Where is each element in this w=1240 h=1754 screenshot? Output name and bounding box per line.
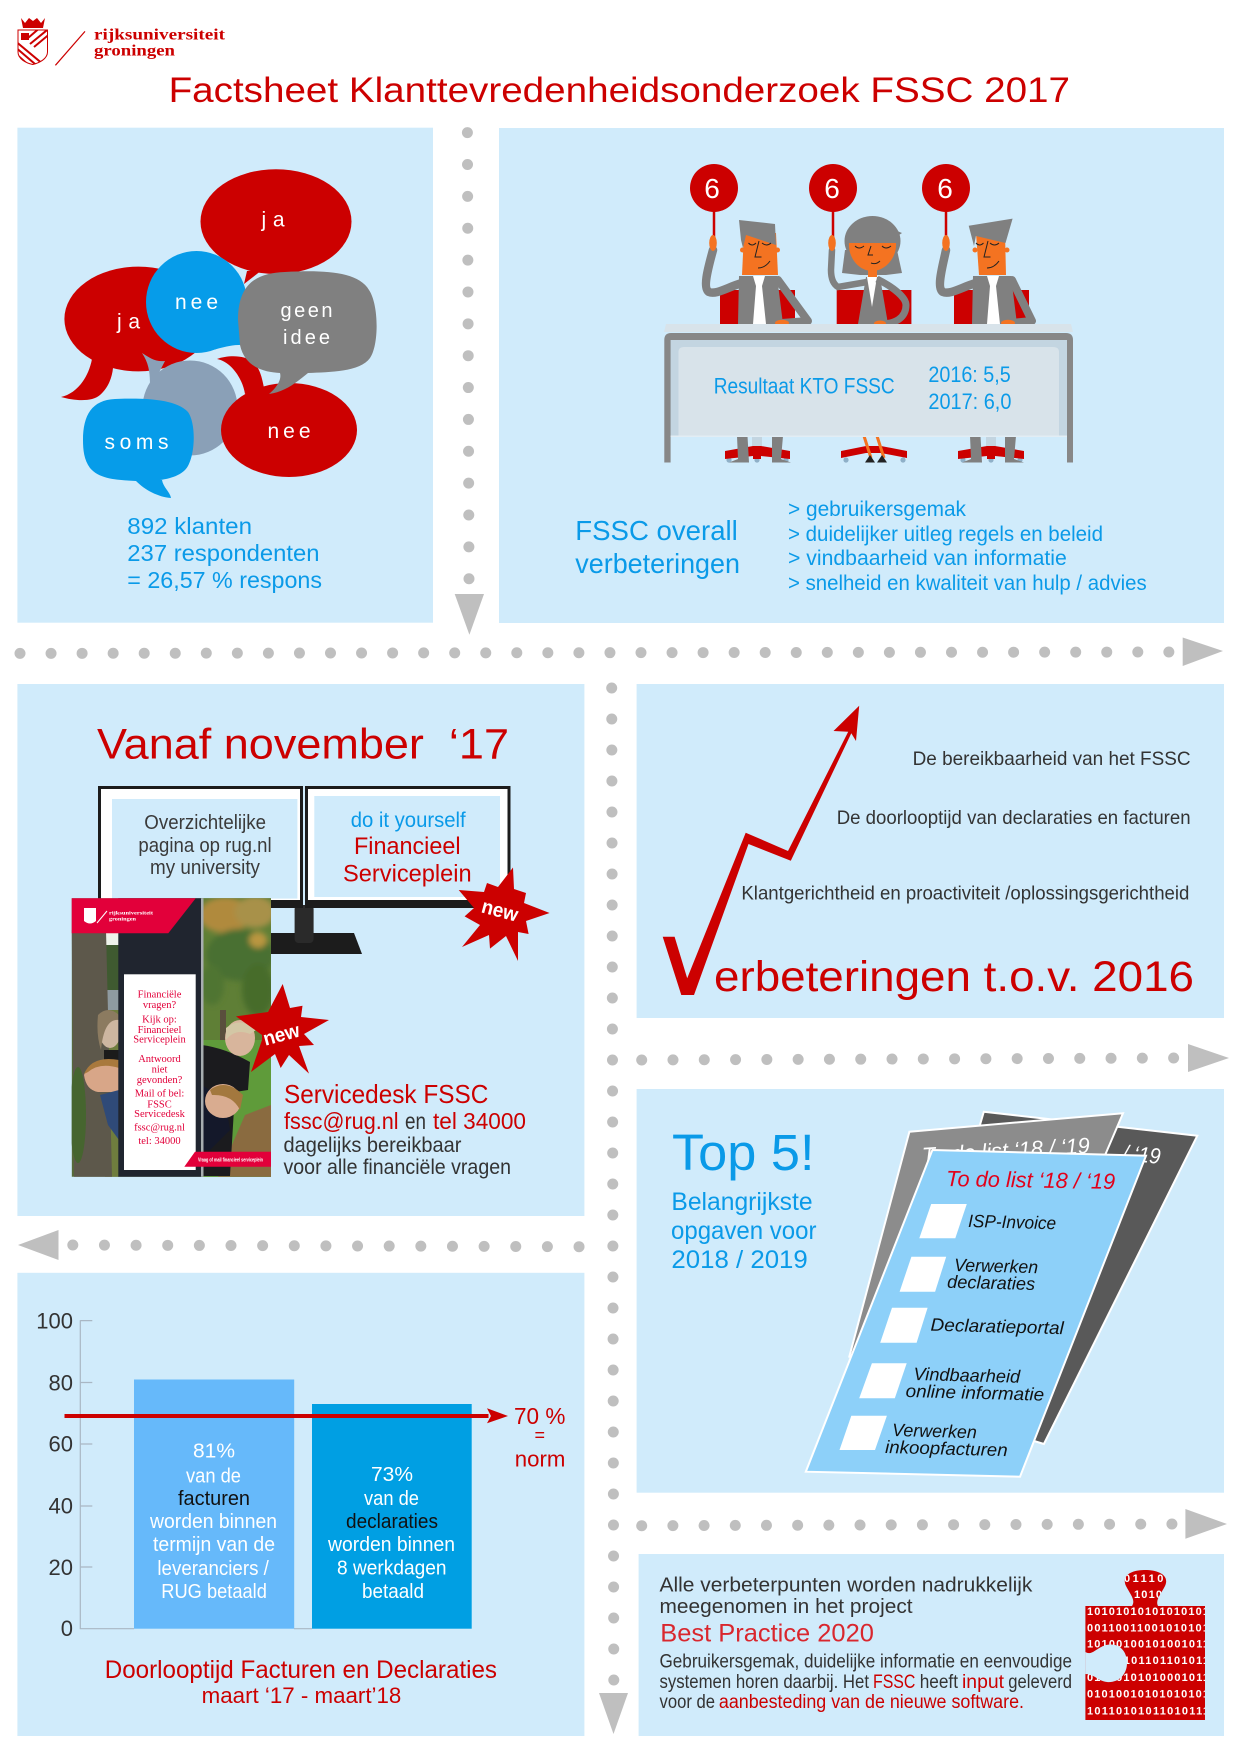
speech bubble: nee (red): [217, 356, 357, 477]
poster card: Antwoord: [138, 1054, 182, 1065]
panel: doorlooptijd chart: [17, 1273, 584, 1736]
body text: FSSC: [873, 1672, 915, 1693]
item: Verwerken declaraties: [900, 1255, 1038, 1294]
score signs: 6: [937, 173, 953, 204]
icon: binary puzzle piece: 10101010101010101: [1087, 1606, 1209, 1618]
middle sheet: To do list ‘18 / ‘19: [921, 1133, 1090, 1168]
heading: Top 5: Top 5!: [672, 1124, 814, 1181]
poster card: tel: 34000: [138, 1136, 181, 1147]
axis labels: 100: [36, 1309, 73, 1334]
bar: facturen 81%: 81%: [193, 1439, 235, 1462]
bar: facturen 81%: RUG betaald: [161, 1580, 267, 1603]
back sheet: [900, 1112, 1197, 1444]
servicedesk contact text: voor alle financiële vragen: [284, 1156, 511, 1179]
item: Vindbaarheid online informatie: [859, 1363, 1044, 1405]
monitor: overzichtelijke pagina: pagina op rug.nl: [138, 835, 272, 857]
dotted arrow: right (row 3): [642, 1509, 1227, 1539]
speech bubble: nee (blue): [146, 251, 247, 353]
poster banner logo: [84, 908, 153, 924]
body text: aanbesteding van de nieuwe software.: [719, 1692, 1024, 1713]
heading: verbeteringen: erbeteringen t.o.v. 2016: [714, 953, 1194, 1001]
bar: declaraties 73%: 8 werkdagen: [337, 1556, 446, 1580]
servicedesk contact text: fssc@rug.nl: [284, 1108, 399, 1134]
poster card: Financiële: [138, 990, 182, 1001]
axis labels: 0: [61, 1616, 73, 1641]
heading: Vanaf november '17: Vanaf november ‘17: [97, 721, 509, 769]
list: verbeteringen: > snelheid en kwaliteit van hulp / advies: [788, 571, 1147, 595]
poster banner: [72, 898, 196, 933]
speech bubble: nee (red): nee: [268, 420, 310, 443]
icon: binary puzzle piece: 1010: [1134, 1589, 1162, 1601]
table text: results: 2016: 5,5: [928, 362, 1011, 387]
poster banner logo: rijksuniversiteit: [109, 910, 153, 916]
logo wordmark: groningen: [94, 42, 175, 60]
icon: binary puzzle piece: 01010010101010101: [1087, 1689, 1209, 1701]
bar: declaraties 73%: worden binnen: [327, 1533, 455, 1556]
bar: declaraties 73%: van de: [364, 1487, 419, 1510]
table text: results: 2017: 6,0: [928, 389, 1011, 414]
bar: declaraties 73%: declaraties: [346, 1510, 438, 1533]
item: Declaratieportal: Declaratieportal: [930, 1315, 1065, 1338]
score signs: 6: [704, 173, 720, 204]
front sheet: To do list ‘18 / ‘19: [946, 1166, 1115, 1194]
axis: [80, 1320, 312, 1629]
improvement items: De bereikbaarheid van het FSSC: [913, 748, 1191, 770]
speech bubble: geen idee: [238, 271, 377, 394]
icon: binary puzzle piece: 01010101010001011: [1087, 1672, 1209, 1684]
intro text: meegenomen in het project: [660, 1595, 913, 1618]
middle sheet: [849, 1113, 1123, 1400]
item: Verwerken inkoopfacturen: inkoopfacturen: [885, 1437, 1008, 1460]
slash: [55, 31, 85, 65]
axis labels: 40: [49, 1494, 73, 1519]
dotted arrow: down (top): [455, 133, 484, 635]
panel: resultaat KTO: [499, 128, 1224, 623]
score signs: 6: [824, 173, 840, 204]
poster card: Financieel: [138, 1025, 181, 1036]
bar: declaraties 73%: betaald: [362, 1580, 424, 1603]
item: Verwerken inkoopfacturen: Verwerken: [892, 1420, 977, 1442]
logo: rijksuniversiteit groningen: [14, 18, 226, 70]
list: verbeteringen: > vindbaarheid van informatie: [788, 546, 1067, 570]
poster card: gevonden?: [137, 1075, 183, 1086]
monitor: overzichtelijke pagina: my university: [150, 857, 260, 879]
subheading: 2018 / 2019: [671, 1246, 808, 1274]
title: Factsheet Klanttevredenheidsonderzoek FSSC 2017: [169, 71, 1070, 110]
dark column: [118, 898, 202, 1177]
judge 3: [940, 205, 1032, 326]
icon: binary puzzle piece: 00110011001010101: [1087, 1623, 1209, 1635]
bar: facturen 81%: facturen: [178, 1487, 250, 1510]
speech bubble: soms: soms: [104, 431, 168, 454]
front sheet: [806, 1150, 1146, 1477]
axis labels: 60: [49, 1432, 73, 1457]
intro text: Alle verbeterpunten worden nadrukkelijk: [660, 1574, 1033, 1597]
monitor: financieel serviceplein: Serviceplein: [343, 860, 472, 887]
monitor: financieel serviceplein: [305, 788, 510, 908]
chart caption: Doorlooptijd Facturen en Declaraties: [105, 1656, 497, 1684]
poster card: Kijk op:: [142, 1015, 177, 1026]
item: Vindbaarheid online informatie: online informatie: [905, 1381, 1044, 1405]
poster card: niet: [152, 1065, 167, 1076]
response statistics: [127, 513, 322, 593]
monitor: financieel serviceplein: do it yourself: [351, 809, 466, 832]
item: Declaratieportal: [880, 1308, 1065, 1343]
intro text: [660, 1574, 1033, 1618]
heading: FSSC overall verbeteringen: [575, 515, 740, 579]
axis labels: [36, 1309, 73, 1641]
improvement items: De doorlooptijd van declaraties en facturen: [837, 807, 1191, 829]
panel: top 5: [637, 1089, 1224, 1493]
speech bubble: nee (blue): nee: [175, 291, 218, 314]
speech bubble: ja (left): [61, 267, 212, 400]
back sheet: / ‘19: [1120, 1140, 1162, 1169]
heading: Best Practice 2020: Best Practice 2020: [660, 1620, 874, 1648]
heading: FSSC overall verbeteringen: FSSC overall: [575, 515, 738, 546]
judge 1: [706, 205, 808, 326]
icon: university crest: [18, 18, 48, 65]
illustration: judges at table: [664, 164, 1073, 463]
dotted arrow: left: [18, 1230, 579, 1260]
to do list sheets: [806, 1112, 1197, 1477]
poster card: Mail of bel:: [135, 1089, 184, 1100]
servicedesk contact text: dagelijks bereikbaar: [284, 1134, 461, 1157]
body text: Gebruikersgemak, duidelijke informatie en eenvoudige: [660, 1652, 1072, 1673]
bar: facturen 81%: van de: [186, 1464, 241, 1488]
poster card: fssc@rug.nl: [134, 1123, 185, 1134]
bar: facturen 81%: termijn van de: [153, 1533, 275, 1556]
servicedesk contact text: Servicedesk FSSC: [284, 1079, 488, 1109]
panel: vanaf november 17: [17, 684, 584, 1216]
icon: binary puzzle piece: 10110101011010111: [1087, 1705, 1209, 1717]
bar: facturen 81%: [134, 1380, 294, 1629]
badge: new (monitor): new: [479, 896, 521, 927]
norm label: [514, 1403, 565, 1472]
monitor: overzichtelijke pagina: Overzichtelijke: [144, 812, 266, 834]
item: ISP-Invoice: ISP-Invoice: [968, 1211, 1056, 1233]
servicedesk contact text: [284, 1079, 526, 1179]
icon: binary puzzle piece: 10100101101101011: [1087, 1655, 1209, 1667]
logo wordmark: [94, 27, 226, 60]
norm label: 70 %: [514, 1403, 565, 1429]
speech bubble: geen idee: geen: [280, 300, 332, 322]
panel: respons: [17, 128, 433, 623]
axis labels: 80: [49, 1370, 73, 1396]
subheading: [671, 1188, 816, 1274]
improvement items: [741, 748, 1191, 904]
heading: FSSC overall verbeteringen: verbeteringen: [575, 548, 740, 579]
body text: geleverd: [1008, 1672, 1072, 1693]
left photo: [106, 933, 118, 945]
bar: declaraties 73%: 73%: [371, 1463, 413, 1486]
dotted arrow: right (row 2): [642, 1044, 1229, 1072]
table text: results: [714, 362, 1011, 414]
bar: facturen 81%: worden binnen: [149, 1510, 277, 1533]
panel: best practice 2020: [639, 1554, 1224, 1736]
poster card: Serviceplein: [133, 1035, 186, 1046]
score signs: [690, 164, 970, 212]
item: ISP-Invoice: [919, 1204, 1056, 1238]
subheading: opgaven voor: [671, 1217, 816, 1245]
poster card: [124, 974, 196, 1170]
body text: voor de: [660, 1692, 715, 1713]
chart caption: maart ‘17 - maart’18: [202, 1683, 401, 1708]
item: Verwerken declaraties: Verwerken: [954, 1255, 1038, 1277]
axis labels: 20: [49, 1555, 73, 1580]
norm arrow 70%: [64, 1408, 508, 1423]
dotted arrow: down (centre): [599, 688, 628, 1734]
list: verbeteringen: > gebruikersgemak: [788, 497, 966, 521]
item: Verwerken declaraties: declaraties: [947, 1272, 1035, 1294]
judge 2: [828, 205, 911, 326]
servicedesk contact text: tel 34000: [433, 1108, 526, 1134]
monitor: overzichtelijke pagina: [98, 788, 302, 908]
legs and chair bases: [725, 436, 1024, 463]
norm label: =: [534, 1425, 545, 1445]
badge: new (poster): [236, 984, 329, 1074]
body text: input: [962, 1672, 1005, 1693]
monitor stand: [271, 905, 362, 954]
bar: facturen 81%: leveranciers /: [157, 1557, 269, 1580]
poster card: FSSC: [147, 1100, 172, 1111]
icon: binary puzzle piece: [1085, 1570, 1209, 1720]
servicedesk contact text: en: [405, 1108, 426, 1134]
subheading: Belangrijkste: [671, 1188, 813, 1216]
list: verbeteringen: > duidelijker uitleg regels en beleid: [788, 522, 1103, 546]
speech bubble: ja (top): ja: [260, 208, 285, 232]
body text: [660, 1652, 1072, 1713]
response statistics: = 26,57 % respons: [127, 567, 322, 593]
chart caption: [105, 1656, 497, 1708]
poster card: Servicedesk: [134, 1109, 186, 1120]
improvement items: Klantgerichtheid en proactiviteit /oplossingsgerichtheid: [741, 882, 1189, 904]
dotted arrow: right (row 1): [20, 638, 1223, 666]
monitor: financieel serviceplein: Financieel: [354, 833, 461, 860]
item: Vindbaarheid online informatie: Vindbaarheid: [913, 1364, 1021, 1387]
list: verbeteringen: [788, 497, 1147, 595]
response statistics: 892 klanten: [127, 513, 252, 539]
table text: results: Resultaat KTO FSSC: [714, 374, 895, 399]
icon: check mark arrow: [663, 706, 859, 995]
panel: verbeteringen t.o.v. 2016: [637, 684, 1224, 1018]
speech bubble: ja (left): ja: [116, 310, 140, 334]
body text: systemen horen daarbij. Het: [660, 1672, 870, 1693]
right photo: [202, 898, 271, 1177]
badge: new (monitor): [459, 868, 550, 961]
poster footer banner: [184, 1152, 271, 1167]
norm label: norm: [515, 1446, 565, 1472]
badge: new (poster): new: [261, 1020, 303, 1051]
table: [664, 324, 1073, 462]
bar: declaraties 73%: [312, 1404, 472, 1629]
poster banner logo: groningen: [109, 916, 137, 922]
response statistics: 237 respondenten: [127, 540, 320, 566]
icon: binary puzzle piece: 011100: [1124, 1573, 1172, 1585]
logo wordmark: rijksuniversiteit: [94, 27, 226, 44]
icon: binary puzzle piece: 10100100101001011: [1087, 1639, 1209, 1651]
speech bubble: empty grey: [142, 353, 238, 456]
poster card: vragen?: [143, 1000, 176, 1011]
speech bubble: ja (top): [200, 169, 352, 284]
speech bubble: geen idee: idee: [283, 327, 330, 349]
speech bubble: soms: [83, 399, 194, 498]
poster: servicedesk photo: [70, 896, 275, 1177]
bar chart: [36, 1309, 565, 1641]
poster footer banner: Vraag of mail financieel serviceplein: [198, 1158, 263, 1164]
item: Verwerken inkoopfacturen: [840, 1416, 1008, 1460]
body text: heeft: [920, 1672, 959, 1693]
